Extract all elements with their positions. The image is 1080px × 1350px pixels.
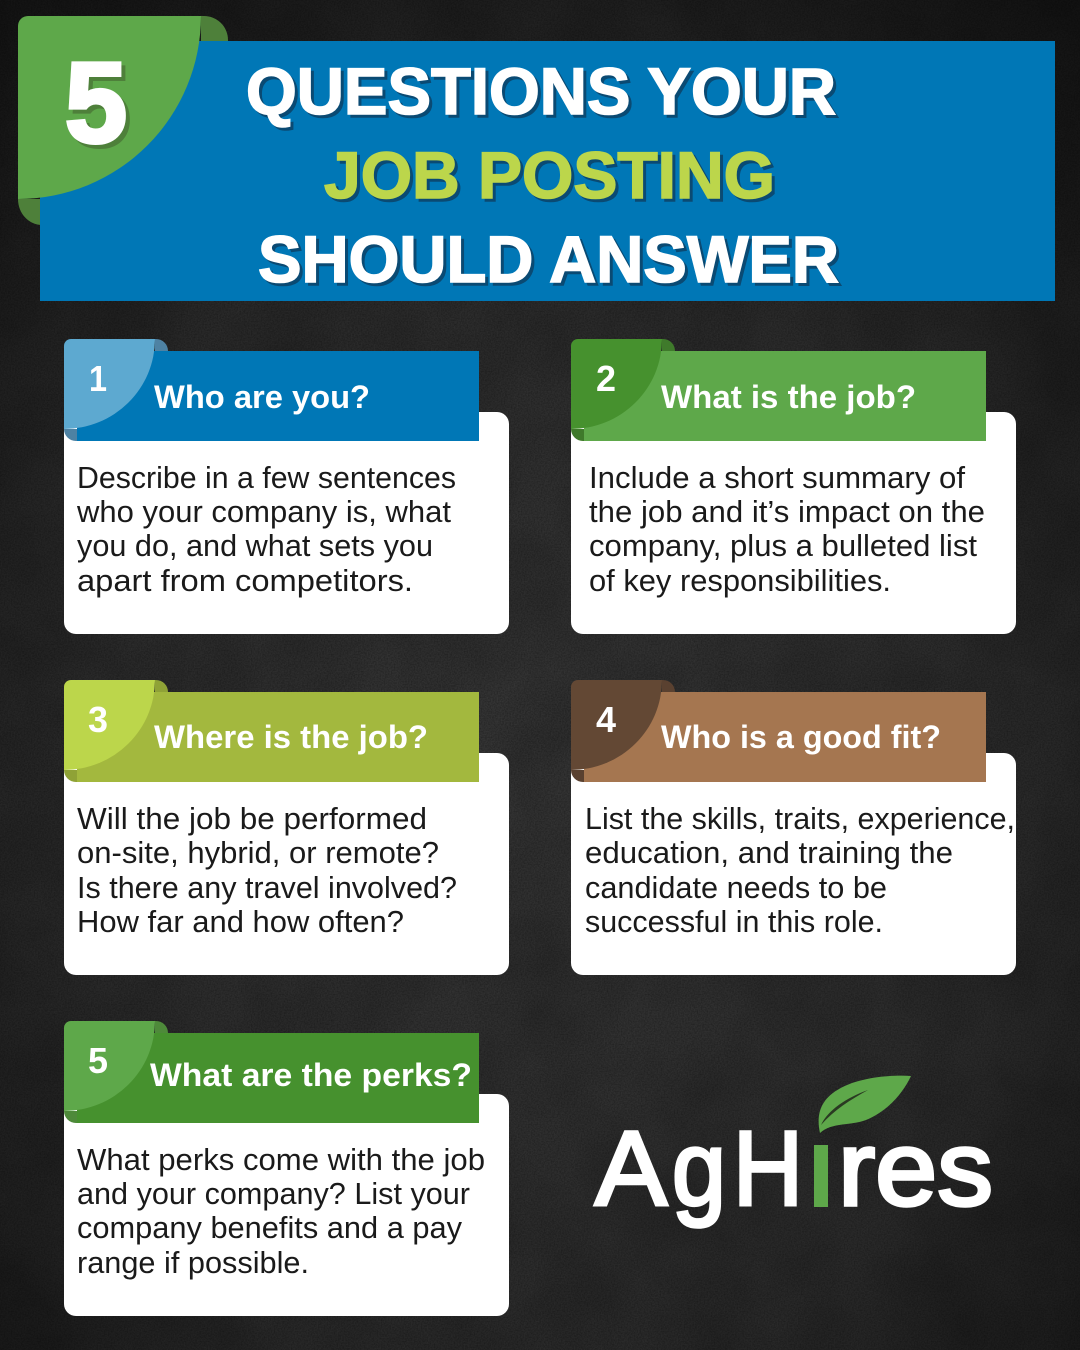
card 5: what are the perks: and your company? List your	[77, 1176, 470, 1211]
logo: AgHires: A	[595, 1110, 667, 1228]
card 3: where is the job: 3	[88, 699, 108, 740]
title line 2: JOB POSTING	[324, 138, 775, 212]
title line 3: SHOULD ANSWER	[261, 225, 842, 299]
title line 2: JOB POSTING	[327, 141, 778, 215]
card 3: where is the job: on-site, hybrid, or remote?	[77, 835, 439, 870]
big number 5: 5	[69, 44, 131, 171]
card 2: what is the job	[571, 339, 1016, 634]
card 3: where is the job: Where is the job?	[154, 719, 428, 755]
logo: AgHires: H	[733, 1110, 803, 1228]
card 3: where is the job	[64, 680, 509, 975]
banner blue panel	[40, 41, 1055, 301]
card 4: who is a good fit: candidate needs to be	[585, 870, 887, 905]
card 2: what is the job: Include a short summary of	[589, 460, 965, 495]
card 1: who are you: Describe in a few sentences	[77, 460, 456, 495]
card 5: what are the perks: What perks come with the job	[77, 1142, 485, 1177]
title line 1: QUESTIONS YOUR	[249, 57, 839, 131]
card 1: who are you: you do, and what sets you	[77, 528, 433, 563]
title line 3: SHOULD ANSWER	[258, 222, 839, 296]
card 1: who are you: who your company is, what	[76, 494, 451, 529]
card 4: who is a good fit: List the skills, traits, experience,	[585, 801, 1015, 836]
header banner	[18, 16, 1055, 301]
banner fold tabs	[18, 16, 228, 225]
card 1: who are you: Who are you?	[154, 379, 370, 415]
card 2: what is the job: of key responsibilities.	[589, 563, 891, 598]
card 1: who are you	[64, 339, 509, 634]
card 5: what are the perks	[64, 1021, 509, 1316]
card 5: what are the perks: What are the perks?	[150, 1057, 472, 1093]
card 4: who is a good fit: successful in this role.	[585, 904, 883, 939]
card 3: where is the job: How far and how often?	[77, 904, 404, 939]
card 5: what are the perks: company benefits and a pay	[77, 1210, 462, 1245]
icon: leaf	[819, 1076, 911, 1133]
card 2: what is the job: 2	[596, 358, 616, 399]
card 5: what are the perks: range if possible.	[77, 1245, 309, 1280]
card 3: where is the job: Is there any travel involved?	[77, 870, 457, 905]
card 4: who is a good fit: Who is a good fit?	[661, 719, 941, 755]
card 2: what is the job: company, plus a bulleted list	[589, 528, 977, 563]
logo: AgHires: res	[838, 1110, 993, 1228]
banner green corner	[18, 16, 201, 199]
card 2: what is the job: What is the job?	[661, 379, 916, 415]
logo: AgHires: g	[672, 1110, 726, 1228]
title line 1: QUESTIONS YOUR	[246, 54, 836, 128]
card 4: who is a good fit: 4	[596, 699, 616, 740]
card 1: who are you: apart from competitors.	[77, 563, 413, 598]
card 1: who are you: 1	[89, 358, 107, 399]
card 2: what is the job: the job and it’s impact on the	[589, 494, 985, 529]
card 4: who is a good fit	[571, 680, 1016, 975]
card 3: where is the job: Will the job be performed	[77, 801, 427, 836]
big number 5: 5	[65, 40, 127, 167]
card 5: what are the perks: 5	[88, 1040, 108, 1081]
logo: AgHires	[595, 1076, 993, 1228]
card 4: who is a good fit: education, and training the	[585, 835, 953, 870]
